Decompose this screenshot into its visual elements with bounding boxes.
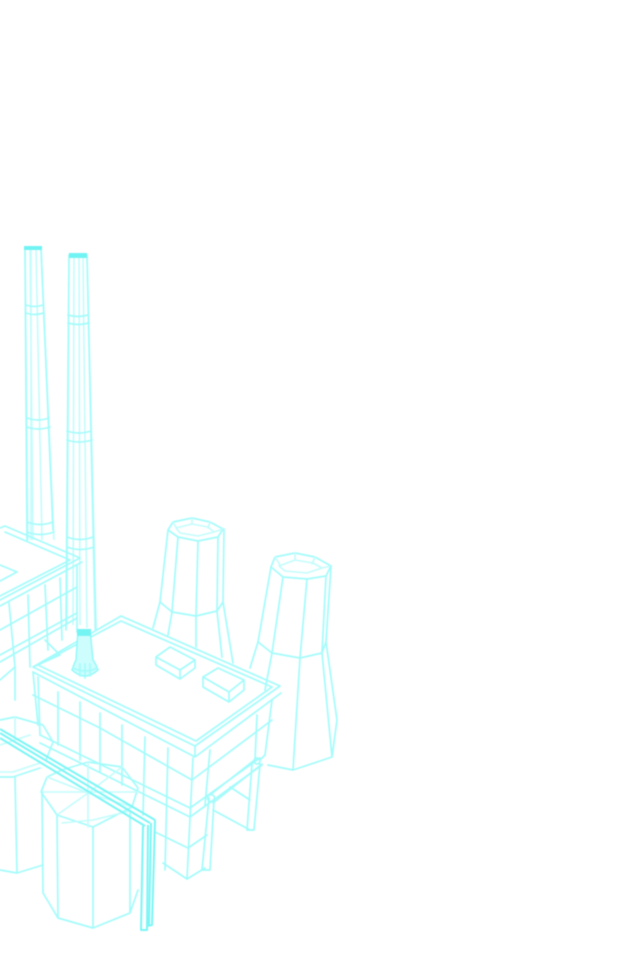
smokestack: right: [66, 253, 96, 630]
pipe: overhead with downpipe: [0, 729, 155, 930]
building: left block: [0, 526, 82, 700]
pipe columns: right of building: [202, 755, 265, 870]
exhaust chimney: [72, 629, 98, 678]
smokestack: left: [24, 246, 54, 540]
storage tank: front: [41, 762, 138, 928]
building: main block roof: [33, 616, 281, 757]
building: main block walls: [33, 672, 272, 879]
roof box: left: [156, 647, 195, 679]
cooling tower: front: [250, 553, 337, 770]
roof box: right: [203, 668, 244, 702]
storage tank: rear: [0, 717, 53, 873]
cooling tower: rear: [153, 518, 233, 663]
